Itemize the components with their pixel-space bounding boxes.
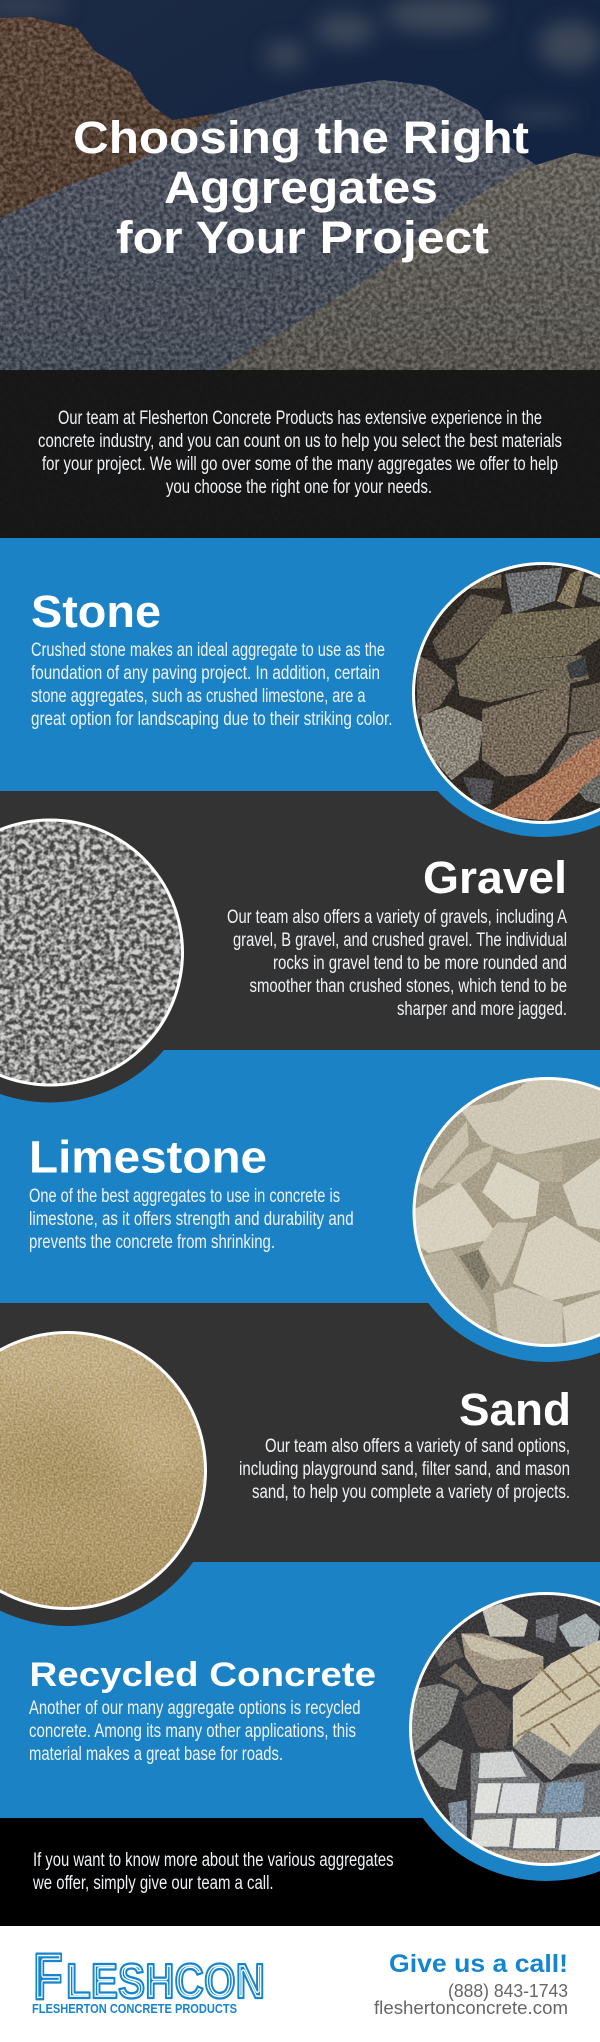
text: recycled concrete description: Another of our many aggregate options is recycled xyxy=(29,1698,360,1719)
halo: blue behind limestone photo xyxy=(398,1062,600,1362)
heading: recycled concrete: Recycled Concrete xyxy=(30,1656,376,1694)
panel: sand xyxy=(0,1303,600,1562)
panel: limestone xyxy=(0,1050,600,1303)
text: limestone description: prevents the concrete from shrinking. xyxy=(29,1232,275,1253)
title xyxy=(73,112,529,263)
text: recycled concrete description xyxy=(29,1698,360,1765)
logo: Fleshcon: LESHCON xyxy=(66,1955,265,2009)
logo tagline: FLESHERTON CONCRETE PRODUCTS xyxy=(32,2002,237,2016)
intro paragraph: you choose the right one for your needs. xyxy=(166,477,432,498)
text: limestone description: One of the best aggregates to use in concrete is xyxy=(29,1186,340,1207)
text: closing message xyxy=(32,1850,393,1894)
halo: blue behind recycled concrete photo xyxy=(394,1577,600,1881)
contact: website: fleshertonconcrete.com xyxy=(374,1997,568,2018)
panel: footer xyxy=(0,1926,600,2042)
text: stone description: foundation of any paving project. In addition, certain xyxy=(31,663,380,684)
panel: gravel xyxy=(0,791,600,1050)
heading: sand: Sand xyxy=(459,1384,571,1435)
halo: blue behind stone photo xyxy=(399,549,600,837)
text: stone description xyxy=(31,640,392,730)
heading: gravel: Gravel xyxy=(423,852,567,903)
text: closing message: we offer, simply give our team a call. xyxy=(32,1873,274,1894)
title: Choosing the Right xyxy=(73,112,529,163)
text: recycled concrete description: material makes a great base for roads. xyxy=(29,1744,283,1765)
panel: recycled concrete xyxy=(0,1562,600,1818)
photo: limestone xyxy=(410,1075,600,1350)
text: limestone description xyxy=(29,1186,354,1253)
heading: limestone: Limestone xyxy=(29,1132,267,1182)
contact: phone: (888) 843-1743 xyxy=(448,1980,568,2001)
contact: give us a call: Give us a call! xyxy=(389,1950,568,1978)
logo: Fleshcon: F xyxy=(33,1939,63,2013)
text: stone description: stone aggregates, such as crushed limestone, are a xyxy=(31,686,366,707)
logo: Fleshcon: LESHCON xyxy=(66,1955,265,2009)
logo: Fleshcon: F xyxy=(33,1939,63,2013)
text: limestone description: limestone, as it offers strength and durability and xyxy=(29,1209,354,1230)
photo: recycled concrete xyxy=(405,1590,600,1870)
hero photo: aggregate piles xyxy=(0,0,600,538)
intro paragraph xyxy=(38,408,562,498)
title: Aggregates xyxy=(164,162,438,213)
photo: gravel xyxy=(0,815,190,1090)
text: closing message: If you want to know more about the various aggregates xyxy=(33,1850,394,1871)
photo: stone xyxy=(410,560,600,830)
text: recycled concrete description: concrete. Among its many other applications, this xyxy=(29,1721,356,1742)
halo: dark behind sand photo xyxy=(0,1315,223,1626)
text: sand description xyxy=(239,1436,570,1503)
text: stone description: Crushed stone makes an ideal aggregate to use as the xyxy=(31,640,385,661)
halo: dark behind gravel photo xyxy=(0,802,200,1102)
title: for Your Project xyxy=(116,212,489,263)
panel: stone xyxy=(0,538,600,791)
heading: stone: Stone xyxy=(31,586,161,637)
text: stone description: great option for landscaping due to their striking color. xyxy=(31,709,392,730)
logo: Fleshcon xyxy=(32,1939,265,2016)
photo: sand xyxy=(0,1323,210,1618)
text: gravel description xyxy=(227,907,567,1020)
panel: call to action xyxy=(0,1818,600,1926)
